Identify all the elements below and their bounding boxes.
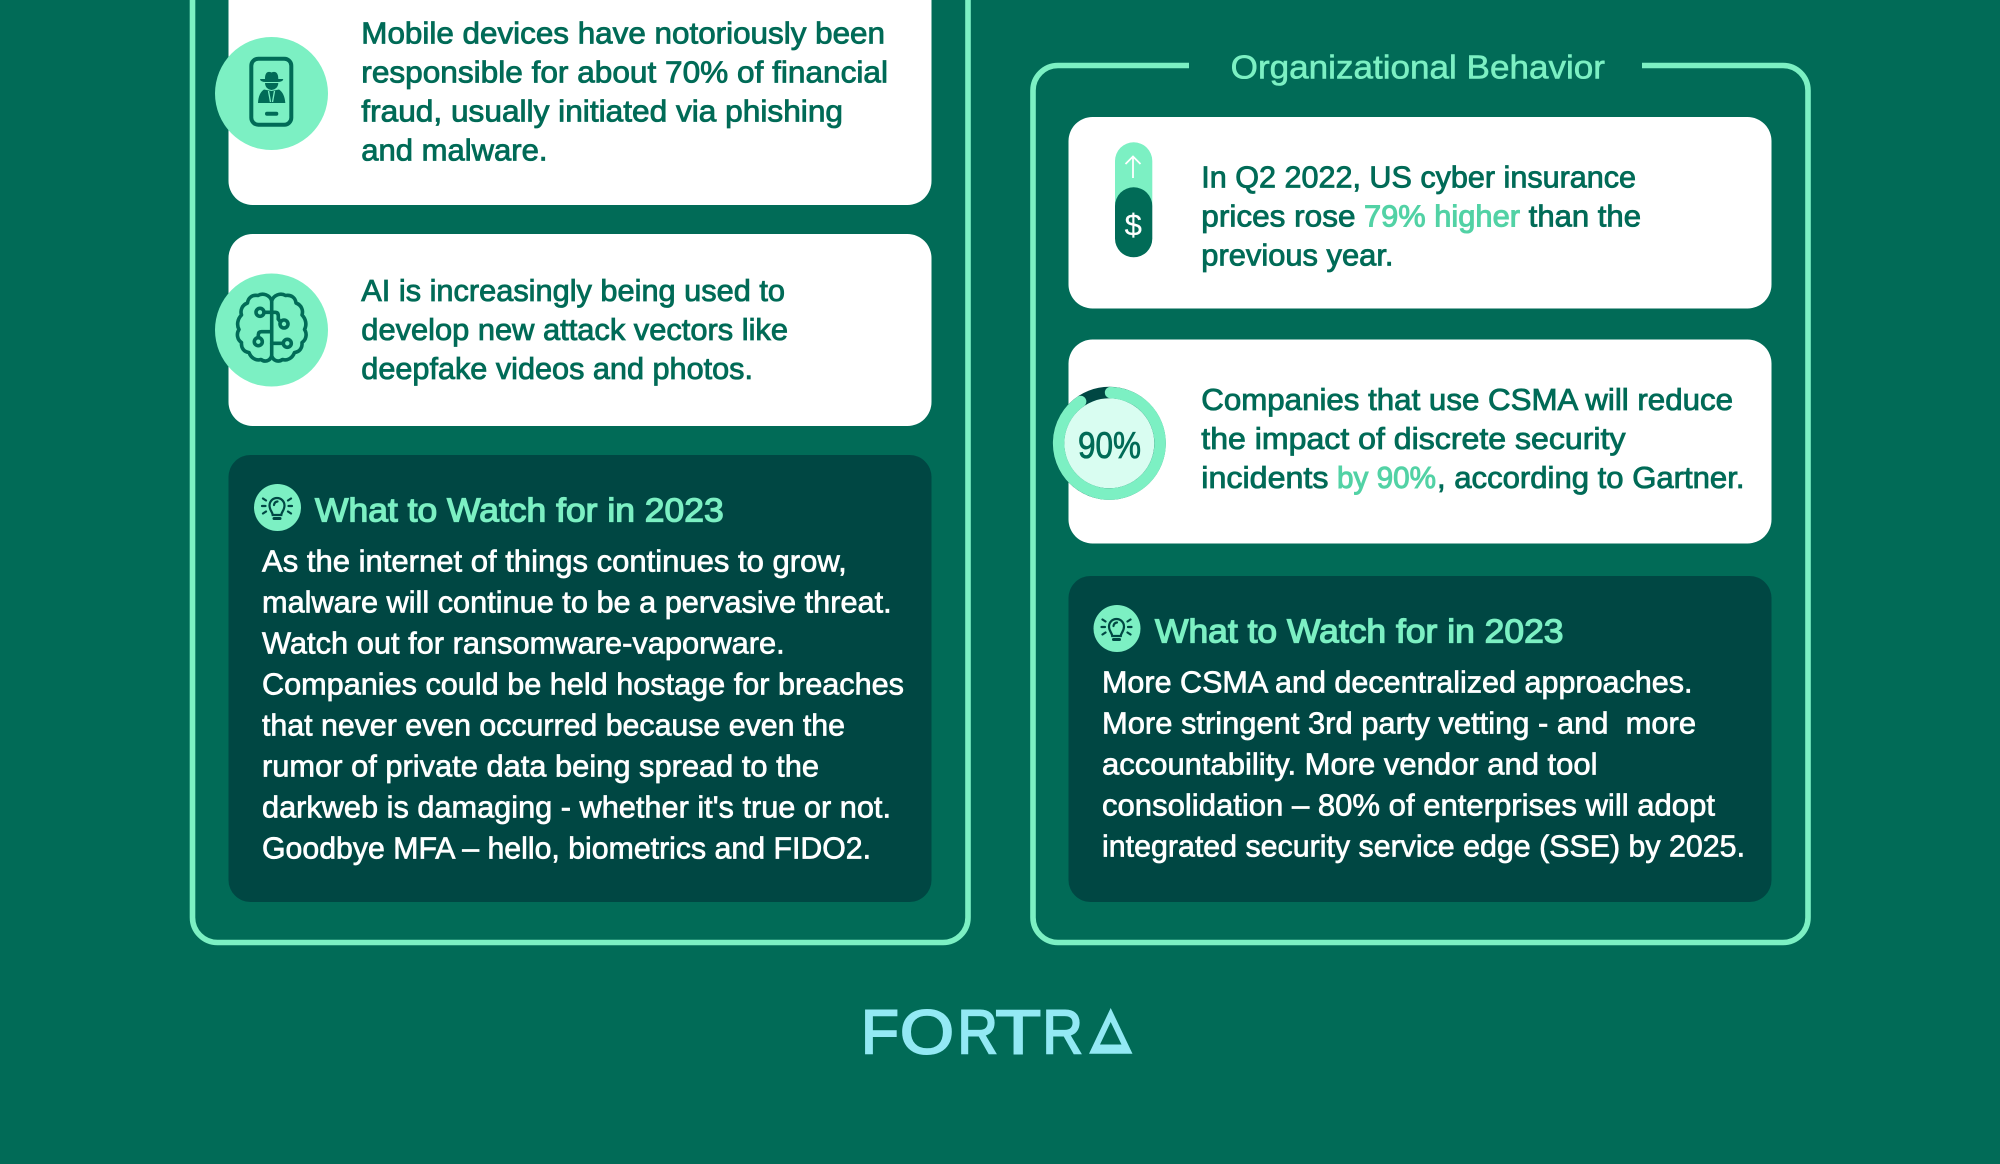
panel: organizational behavior [1033,48,1808,943]
logo: Fortra: O [900,997,954,1067]
text: CSMA: Companies that use CSMA will reduce [1201,383,1733,417]
text: CSMA: the impact of discrete security [1201,422,1626,456]
text: watch list right: consolidation – 80% of enterprises will adopt [1102,789,1716,823]
text: watch list left: malware will continue to be a pervasive threat. [262,586,892,620]
icon: brain with circuit [215,274,328,386]
text: cyber insurance: than the [1529,200,1641,234]
icon: price rising pill: $ [1125,208,1142,242]
card: mobile devices fraud [215,0,932,205]
text: watch list right [1102,666,1745,864]
text: watch list left: Goodbye MFA – hello, biometrics and FIDO2. [262,832,871,866]
card: AI attack vectors [215,234,932,426]
text: watch list left: As the internet of things continues to grow, [262,545,847,579]
text: watch list left: darkweb is damaging - whether it's true or not. [262,791,891,825]
text: watch list right: More stringent 3rd party vetting - and more [1102,707,1696,741]
card: CSMA [1059,340,1772,544]
logo: Fortra: R [1042,999,1083,1067]
text: watch list left: Watch out for ransomware-vaporware. [262,627,785,661]
callout: what to watch right [1068,576,1772,902]
text: cyber insurance: In Q2 2022, US cyber insurance [1201,161,1636,195]
logo: Fortra: T [996,997,1041,1067]
text: watch list left [262,545,904,866]
text: CSMA: incidents [1201,461,1328,495]
text: cyber insurance [1201,161,1641,273]
text: cyber insurance: prices rose [1201,200,1356,234]
text: AI: develop new attack vectors like [361,313,788,347]
icon: 90% donut [1059,393,1160,494]
icon: price rising pill [1115,142,1152,257]
panel: left column (threats) [192,0,968,942]
text: watch list left: Companies could be held hostage for breaches [262,668,904,702]
text: CSMA [1201,383,1744,495]
heading: what to watch: What to Watch for in 2023 [1155,613,1564,650]
icon: light bulb [1094,605,1140,652]
text: mobile devices [361,16,888,167]
text: mobile devices: responsible for about 70% of financial [361,55,888,89]
text: CSMA: , according to Gartner. [1437,461,1744,495]
heading: organizational behavior: Organizational Behavior [1231,48,1605,85]
text: watch list left: that never even occurred because even the [262,709,845,743]
text: AI: deepfake videos and photos. [361,352,753,386]
text: watch list right: integrated security service edge (SSE) by 2025. [1102,830,1745,864]
text: AI: AI is increasingly being used to [361,274,785,308]
icon: light bulb [254,484,301,531]
text: mobile devices: and malware. [361,133,548,167]
icon: 90% donut: 90% [1078,425,1141,466]
text: cyber insurance: previous year. [1201,239,1394,273]
text: watch list right: accountability. More vendor and tool [1102,748,1598,782]
logo: Fortra: R [958,999,998,1067]
logo: Fortra [861,997,1132,1068]
text: mobile devices: fraud, usually initiated via phishing [361,94,843,128]
icon: phone with spy [215,37,328,150]
heading: what to watch: What to Watch for in 2023 [315,492,724,529]
callout: what to watch left [228,455,932,902]
text: cyber insurance: 79% higher [1364,200,1520,234]
text: mobile devices: Mobile devices have notoriously been [361,16,885,50]
card: cyber insurance [1068,117,1772,308]
text: AI [361,274,788,386]
logo: Fortra: F [861,998,899,1068]
text: watch list left: rumor of private data being spread to the [262,750,819,784]
text: watch list right: More CSMA and decentralized approaches. [1102,666,1692,700]
text: CSMA: by 90% [1337,461,1436,495]
